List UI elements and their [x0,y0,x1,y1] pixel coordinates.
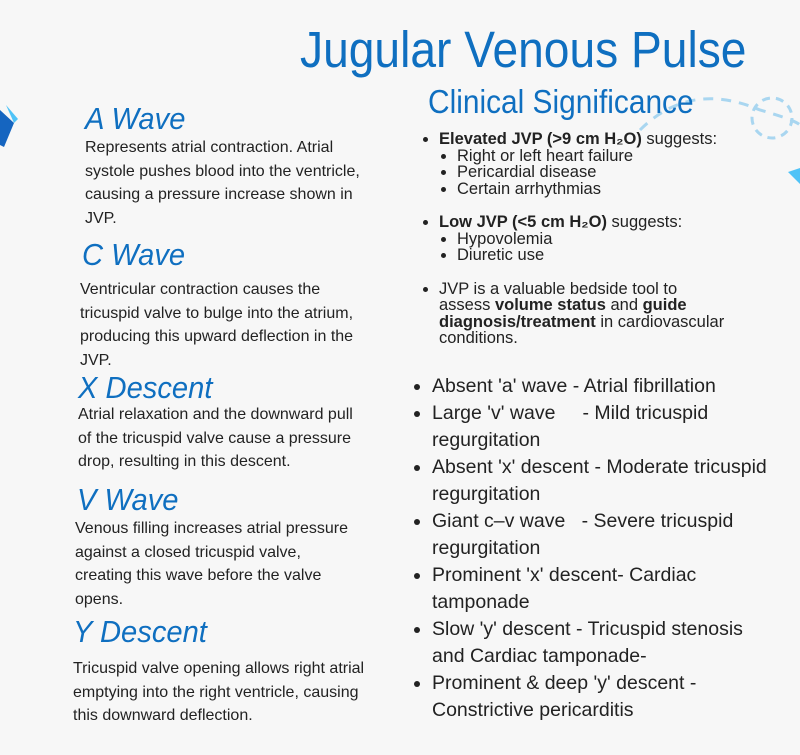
text: V wave: creating this wave before the valve [75,567,321,584]
subtitle: clinical significance: Clinical Significance [428,83,694,120]
clinical significance list [423,130,724,347]
C wave section [80,237,353,368]
clinical significance list: Low JVP (<5 cm H₂O) suggests: [439,213,682,231]
clinical significance list: Pericardial disease [457,163,596,181]
text: Y descent: Tricuspid valve opening allows right atrial emptying into the right ventricle, causing this downward deflection. [73,660,364,724]
abnormal waveform list: Slow 'y' descent - Tricuspid stenosis and Cardiac tamponade- [432,618,743,667]
abnormal waveform list: Prominent & deep 'y' descent - Constrictive pericarditis [432,672,696,721]
clinical significance list: assess volume status and guide diagnosis/treatment in cardiovascular conditions. [439,296,724,347]
text: V wave: against a closed tricuspid valve, [75,544,301,560]
V wave section [75,482,348,608]
abnormal waveform list [414,375,767,721]
text: X descent [78,406,353,470]
decoration: left blue shape [0,105,18,147]
clinical significance list: Right or left heart failure [457,146,633,164]
title: Jugular Venous Pulse [300,21,746,78]
heading: C Wave: C Wave [82,237,185,272]
clinical significance list: Elevated JVP (>9 cm H₂O) suggests: [439,130,717,148]
heading: V Wave: V Wave [77,482,179,517]
X descent section [78,370,353,470]
heading: X Descent: X Descent [78,370,212,405]
abnormal waveform list: Absent 'a' wave - Atrial fibrillation [432,375,716,397]
abnormal waveform list: Giant c–v wave - Severe tricuspid regurgitation [432,510,733,559]
text: X descent: Atrial relaxation and the downward pull [78,406,353,423]
text: X descent: of the tricuspid valve cause a pressure [78,430,351,446]
abnormal waveform list: Large 'v' wave - Mild tricuspid regurgitation [432,402,708,451]
clinical significance list: Diuretic use [457,246,544,264]
text: X descent: drop, resulting in this descent. [78,453,291,470]
abnormal waveform list: Prominent 'x' descent- Cardiac tamponade [432,564,696,613]
abnormal waveform list: Absent 'x' descent - Moderate tricuspid regurgitation [432,456,767,505]
text: V wave: opens. [75,590,123,608]
Y descent section [73,614,364,724]
text: V wave [75,520,348,608]
decoration: dashed circles top right [639,96,800,184]
heading: A Wave: A Wave [85,101,185,136]
text: C wave: Ventricular contraction causes the tricuspid valve to bulge into the atrium, producing this upward deflection in the JVP. [80,281,353,368]
clinical significance list: Certain arrhythmias [457,180,601,198]
text: V wave: Venous filling increases atrial pressure [75,520,348,537]
clinical significance list: Hypovolemia [457,230,552,248]
clinical significance list: JVP is a valuable bedside tool to [439,280,677,298]
heading: Y Descent: Y Descent [73,614,207,649]
A wave section [84,101,360,226]
text: A wave: Represents atrial contraction. Atrial systole pushes blood into the ventricle, causing a pressure increase shown in JVP. [85,139,360,226]
